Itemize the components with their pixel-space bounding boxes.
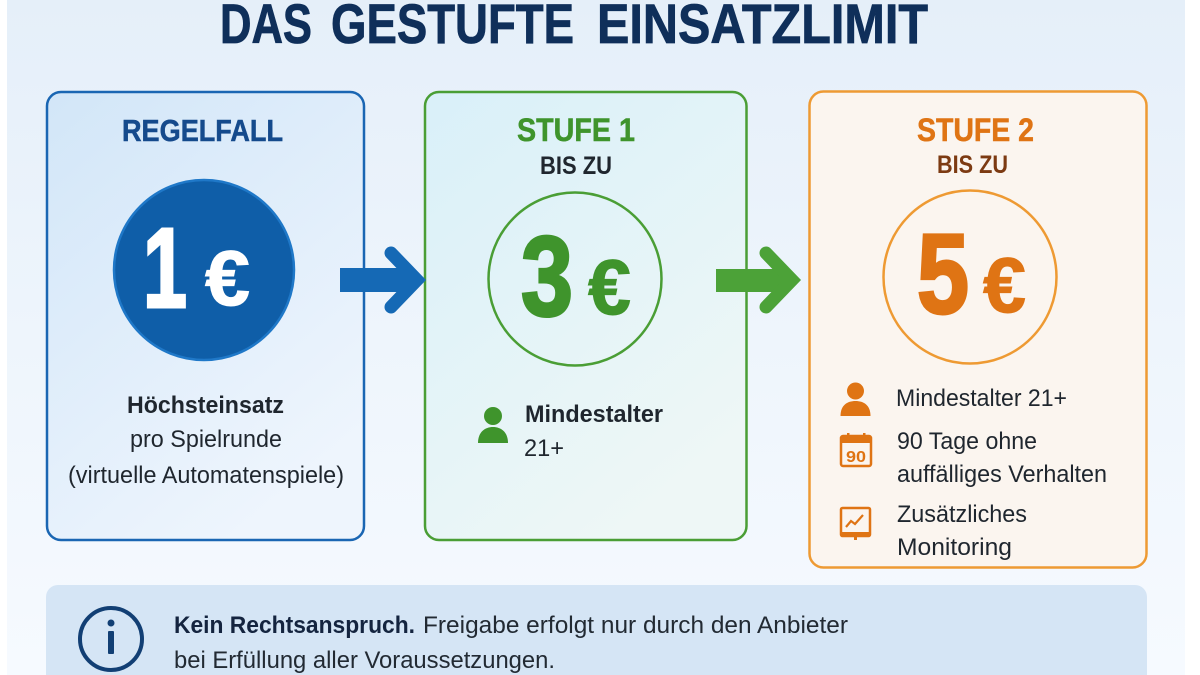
text: note: Kein Rechtsanspruch. xyxy=(174,612,415,639)
text: 90 Tage: 90 Tage ohne xyxy=(897,428,1037,455)
text: Höchsteinsatz description: (virtuelle Automatenspiele) xyxy=(68,462,344,489)
panel: Stufe 1 xyxy=(425,92,746,540)
badge: 1 Euro: 1 xyxy=(143,205,187,331)
text: Zusätzliches Monitoring: Zusätzliches xyxy=(897,501,1027,528)
icon: monitoring chart xyxy=(841,508,870,540)
subheading: bis zu: BIS ZU xyxy=(540,152,612,180)
text: Zusätzliches Monitoring xyxy=(897,501,1027,561)
badge: 5 Euro xyxy=(884,190,1056,364)
subheading: bis zu: BIS ZU xyxy=(937,151,1008,179)
icon: calendar 90 days xyxy=(841,433,871,466)
text: 90 Tage: auffälliges Verhalten xyxy=(897,461,1107,488)
text: Mindestalter xyxy=(524,401,663,462)
icon: info xyxy=(80,608,142,670)
text: Höchsteinsatz description xyxy=(68,392,344,489)
text: note xyxy=(174,612,848,674)
text: Mindestalter: 21+ xyxy=(524,435,564,462)
title xyxy=(220,0,928,55)
text: Höchsteinsatz description: pro Spielrunde xyxy=(130,426,282,453)
badge: 1 Euro xyxy=(114,180,294,360)
callout: legal note xyxy=(46,585,1147,675)
badge: 5 Euro: 5 xyxy=(917,211,969,337)
arrow: Regelfall to Stufe 1 xyxy=(340,253,417,307)
badge: 3 Euro: 3 xyxy=(521,213,573,339)
text: 90 Tage xyxy=(897,428,1107,488)
text: Mindestalter: Mindestalter xyxy=(525,401,663,428)
heading: Stufe 1: STUFE 1 xyxy=(517,112,635,148)
text: Höchsteinsatz description: Höchsteinsatz xyxy=(127,392,284,419)
text: Mindestalter 21+: Mindestalter 21+ xyxy=(896,385,1067,412)
badge: 3 Euro xyxy=(488,192,662,366)
badge: 1 Euro: € xyxy=(205,234,250,322)
badge: 3 Euro: € xyxy=(588,243,631,331)
text: Zusätzliches Monitoring: Monitoring xyxy=(897,534,1012,561)
icon: person green xyxy=(478,407,508,443)
heading: Stufe 2: STUFE 2 xyxy=(917,112,1034,148)
panel: Stufe 2 xyxy=(810,92,1146,568)
text: note: bei Erfüllung aller Voraussetzungen. xyxy=(174,647,555,674)
badge: 5 Euro: € xyxy=(983,241,1026,329)
icon: calendar 90 days: 90 xyxy=(846,449,866,466)
icon: person orange xyxy=(840,382,870,416)
heading: Regelfall: REGELFALL xyxy=(122,113,283,148)
panel: Regelfall xyxy=(47,92,364,540)
arrow: Stufe 1 to Stufe 2 xyxy=(716,253,792,307)
text: note: Freigabe erfolgt nur durch den Anbieter xyxy=(423,612,848,639)
